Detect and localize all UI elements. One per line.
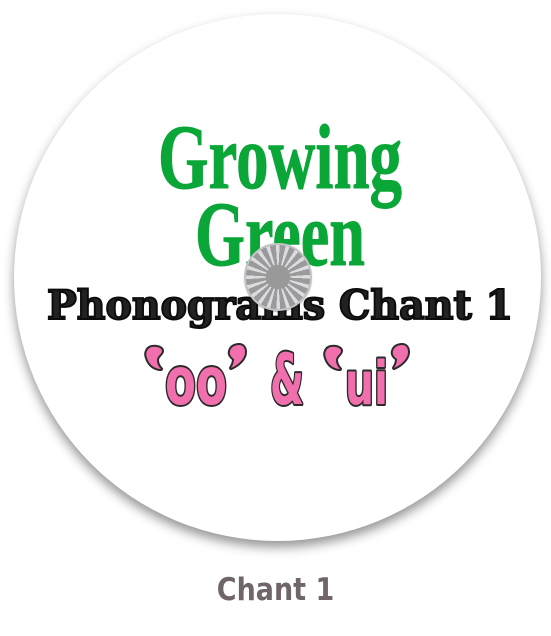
phonogram label: oo and ui: ui — [345, 349, 388, 419]
phonogram label: oo and ui: oo — [165, 343, 227, 420]
phonogram label: oo and ui — [146, 339, 408, 421]
caption: Chant 1 — [217, 572, 334, 608]
subtitle: Phonograms Chant 1: Phonograms Chant 1 — [47, 282, 513, 329]
disc — [14, 14, 541, 541]
title: Growing Green: Growing — [158, 106, 402, 208]
icon: loading spinner — [244, 243, 312, 311]
phonogram label: oo and ui: & — [270, 339, 304, 421]
title: Growing Green — [158, 106, 402, 285]
title: Growing Green: Green — [195, 183, 365, 285]
